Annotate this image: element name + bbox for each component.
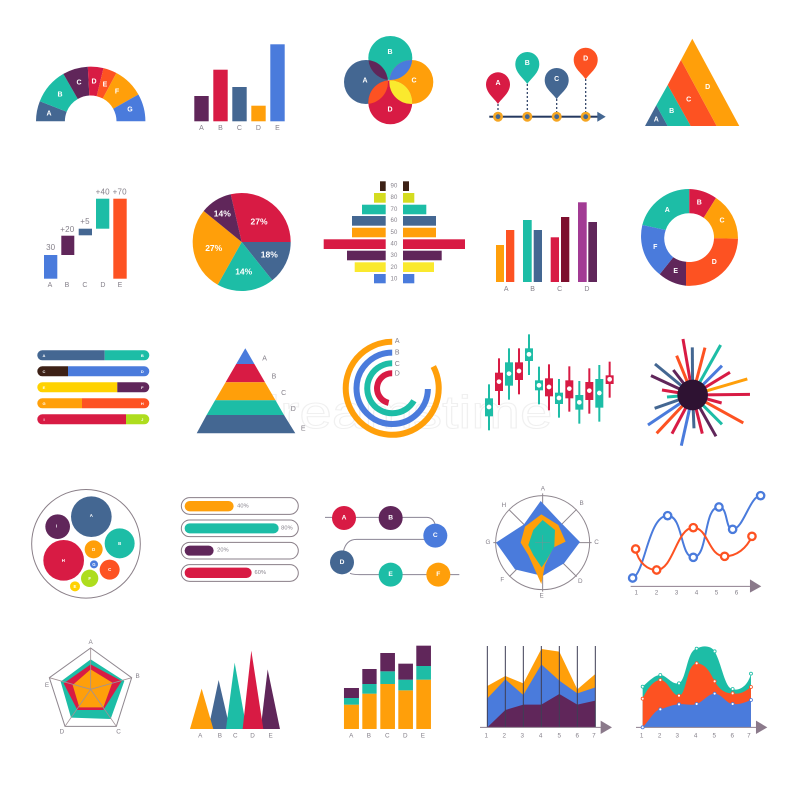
population pyramid: 50 bbox=[391, 230, 398, 236]
triangle bar chart: B bbox=[218, 732, 222, 739]
donut chart: A bbox=[665, 207, 670, 214]
venn diagram: B bbox=[387, 49, 393, 56]
layered pyramid: D bbox=[291, 406, 296, 413]
stacked bar chart: C bbox=[385, 732, 390, 739]
circular radar chart: H bbox=[502, 502, 507, 509]
node flow diagram: C bbox=[433, 532, 438, 539]
progress bars: 20% bbox=[217, 547, 229, 553]
progress bars: 80% bbox=[281, 526, 293, 532]
donut chart: D bbox=[712, 259, 717, 266]
bubble chart: A bbox=[90, 513, 94, 518]
pentagon radar chart: B bbox=[135, 673, 140, 680]
node flow diagram: D bbox=[340, 559, 345, 566]
bubble chart: G bbox=[92, 562, 96, 567]
pie chart: 14% bbox=[214, 208, 231, 218]
grouped bar chart: B bbox=[530, 286, 535, 293]
smooth area chart: 2 bbox=[658, 732, 662, 739]
line chart: 5 bbox=[715, 589, 719, 596]
bubble chart: H bbox=[62, 558, 65, 563]
bubble chart bbox=[32, 489, 140, 598]
population pyramid: 40 bbox=[391, 242, 398, 248]
grouped bar chart: C bbox=[557, 286, 562, 293]
stepped triangle: A bbox=[654, 116, 659, 124]
radial bar chart bbox=[346, 338, 439, 435]
half donut chart: F bbox=[115, 88, 120, 96]
population pyramid: 60 bbox=[391, 218, 398, 224]
bar chart A-E: A bbox=[199, 125, 204, 132]
pie chart bbox=[193, 193, 291, 291]
population pyramid: 70 bbox=[391, 207, 398, 213]
triangle bar chart: C bbox=[233, 732, 238, 739]
stepped triangle: D bbox=[705, 84, 710, 91]
stacked bar chart: B bbox=[367, 732, 371, 739]
half donut chart: G bbox=[127, 106, 133, 114]
smooth area chart: 1 bbox=[640, 732, 644, 739]
donut chart: F bbox=[653, 244, 658, 251]
paired pill bars bbox=[37, 350, 149, 424]
line chart: 4 bbox=[695, 589, 699, 596]
stepped triangle: C bbox=[686, 96, 691, 104]
venn diagram: D bbox=[387, 106, 393, 114]
donut chart: E bbox=[673, 268, 678, 275]
node flow diagram: F bbox=[436, 571, 440, 578]
stacked area chart: 5 bbox=[557, 732, 561, 739]
circular radar chart: G bbox=[485, 539, 491, 546]
paired pill bars: D bbox=[141, 369, 144, 374]
population pyramid: 80 bbox=[391, 195, 398, 201]
radial bar chart: A bbox=[395, 338, 400, 345]
stacked area chart: 6 bbox=[575, 732, 579, 739]
line chart: 1 bbox=[634, 589, 638, 596]
stacked bar chart: A bbox=[349, 732, 354, 739]
bubble chart: C bbox=[108, 567, 111, 572]
waterfall chart: +20 bbox=[60, 225, 75, 234]
circular radar chart bbox=[485, 485, 599, 599]
waterfall chart: E bbox=[118, 282, 123, 289]
radial bar chart: B bbox=[395, 350, 400, 356]
bubble chart: F bbox=[88, 576, 91, 581]
waterfall chart: B bbox=[65, 282, 70, 289]
candlestick chart bbox=[485, 334, 614, 430]
radial bar chart: D bbox=[395, 370, 400, 378]
population pyramid: 90 bbox=[391, 184, 398, 190]
node flow diagram: E bbox=[388, 571, 393, 578]
stacked area chart: 3 bbox=[520, 732, 524, 739]
population pyramid: 30 bbox=[391, 253, 398, 259]
donut chart: B bbox=[697, 200, 702, 206]
population pyramid: 20 bbox=[391, 265, 398, 271]
progress bars: 60% bbox=[254, 570, 266, 576]
waterfall chart: A bbox=[48, 282, 53, 289]
waterfall chart: D bbox=[100, 282, 106, 289]
paired pill bars: J bbox=[141, 417, 143, 422]
line chart: 3 bbox=[675, 589, 679, 596]
paired pill bars: H bbox=[141, 401, 144, 406]
paired pill bars: F bbox=[141, 385, 144, 390]
pin timeline: D bbox=[583, 56, 588, 62]
stacked area chart bbox=[480, 646, 612, 739]
pie chart: 14% bbox=[235, 266, 253, 276]
layered pyramid: A bbox=[262, 356, 267, 362]
paired pill bars: A bbox=[43, 353, 46, 358]
pentagon radar chart bbox=[45, 639, 140, 735]
layered pyramid bbox=[197, 348, 306, 433]
pin timeline: B bbox=[525, 60, 530, 67]
pie chart: 18% bbox=[261, 250, 278, 260]
pentagon radar chart: E bbox=[45, 682, 49, 689]
venn diagram bbox=[344, 36, 433, 124]
smooth area chart: 5 bbox=[712, 732, 716, 739]
stepped triangle: B bbox=[669, 108, 674, 115]
waterfall chart: +70 bbox=[113, 188, 127, 196]
bubble chart: D bbox=[92, 547, 95, 552]
progress bars bbox=[181, 498, 298, 581]
line chart bbox=[629, 492, 764, 596]
grouped bar chart: A bbox=[504, 286, 509, 293]
pentagon radar chart: A bbox=[88, 639, 93, 646]
pin timeline: C bbox=[554, 76, 559, 83]
node flow diagram bbox=[325, 506, 459, 587]
stacked bar chart: E bbox=[421, 732, 425, 739]
donut chart bbox=[641, 189, 738, 286]
bubble chart: E bbox=[74, 584, 77, 589]
radial bar chart: C bbox=[395, 361, 400, 368]
node flow diagram: B bbox=[388, 514, 393, 521]
bar chart A-E: D bbox=[256, 125, 261, 132]
pin timeline: A bbox=[495, 80, 501, 87]
triangle bar chart: E bbox=[268, 732, 273, 739]
node flow diagram: A bbox=[342, 514, 347, 521]
venn diagram: A bbox=[362, 78, 368, 84]
pentagon radar chart: D bbox=[60, 728, 65, 735]
layered pyramid: C bbox=[281, 390, 286, 397]
circular radar chart: F bbox=[500, 576, 504, 583]
line chart: 2 bbox=[655, 589, 659, 596]
smooth area chart: 4 bbox=[694, 732, 698, 739]
bar chart A-E bbox=[194, 44, 285, 132]
stepped triangle bbox=[645, 39, 739, 126]
bar chart A-E: E bbox=[275, 125, 280, 132]
stacked bar chart: D bbox=[403, 732, 408, 739]
half donut chart: B bbox=[57, 92, 63, 98]
grouped bar chart: D bbox=[584, 286, 590, 293]
paired pill bars: E bbox=[43, 385, 46, 390]
waterfall chart bbox=[44, 188, 127, 289]
waterfall chart: C bbox=[82, 282, 88, 289]
circular radar chart: A bbox=[541, 485, 546, 492]
stacked area chart: 2 bbox=[503, 732, 507, 739]
watermark: dreamstime bbox=[248, 386, 552, 438]
line chart: 6 bbox=[735, 589, 739, 596]
triangle bar chart: D bbox=[250, 732, 255, 739]
half donut chart: A bbox=[46, 110, 52, 118]
paired pill bars: G bbox=[42, 401, 46, 406]
bar chart A-E: C bbox=[237, 125, 242, 132]
radial burst chart bbox=[648, 339, 750, 446]
waterfall chart: 30 bbox=[46, 243, 56, 252]
grouped bar chart bbox=[496, 202, 597, 293]
pie chart: 27% bbox=[205, 243, 223, 253]
pin timeline bbox=[486, 48, 606, 122]
layered pyramid: E bbox=[301, 426, 306, 432]
venn diagram: C bbox=[411, 78, 417, 84]
triangle bar chart: A bbox=[198, 732, 203, 739]
bubble chart: I bbox=[56, 523, 57, 528]
stacked area chart: 7 bbox=[592, 732, 596, 739]
layered pyramid: B bbox=[272, 374, 277, 380]
half donut chart bbox=[36, 67, 145, 121]
population pyramid bbox=[324, 181, 465, 283]
pentagon radar chart: C bbox=[116, 728, 121, 735]
waterfall chart: +5 bbox=[80, 217, 90, 226]
bubble chart: B bbox=[118, 541, 121, 546]
pie chart: 27% bbox=[250, 216, 268, 226]
circular radar chart: B bbox=[579, 500, 584, 507]
bar chart A-E: B bbox=[218, 125, 223, 132]
half donut chart: E bbox=[103, 82, 108, 88]
half donut chart: D bbox=[91, 78, 97, 86]
smooth area chart: 7 bbox=[747, 732, 751, 739]
triangle bar chart bbox=[190, 651, 280, 739]
circular radar chart: C bbox=[594, 539, 599, 546]
stacked bar chart bbox=[344, 646, 431, 739]
half donut chart: C bbox=[76, 80, 82, 86]
circular radar chart: D bbox=[578, 578, 583, 585]
waterfall chart: +40 bbox=[96, 188, 110, 196]
population pyramid: 10 bbox=[391, 276, 398, 282]
smooth area chart: 6 bbox=[730, 732, 734, 739]
progress bars: 40% bbox=[237, 504, 249, 510]
paired pill bars: B bbox=[141, 353, 144, 358]
paired pill bars: I bbox=[43, 417, 45, 422]
circular radar chart: E bbox=[539, 592, 544, 599]
smooth area chart bbox=[636, 646, 767, 739]
smooth area chart: 3 bbox=[675, 732, 679, 739]
donut chart: C bbox=[719, 218, 725, 224]
paired pill bars: C bbox=[43, 369, 46, 374]
stacked area chart: 4 bbox=[539, 732, 543, 739]
stacked area chart: 1 bbox=[485, 732, 489, 739]
